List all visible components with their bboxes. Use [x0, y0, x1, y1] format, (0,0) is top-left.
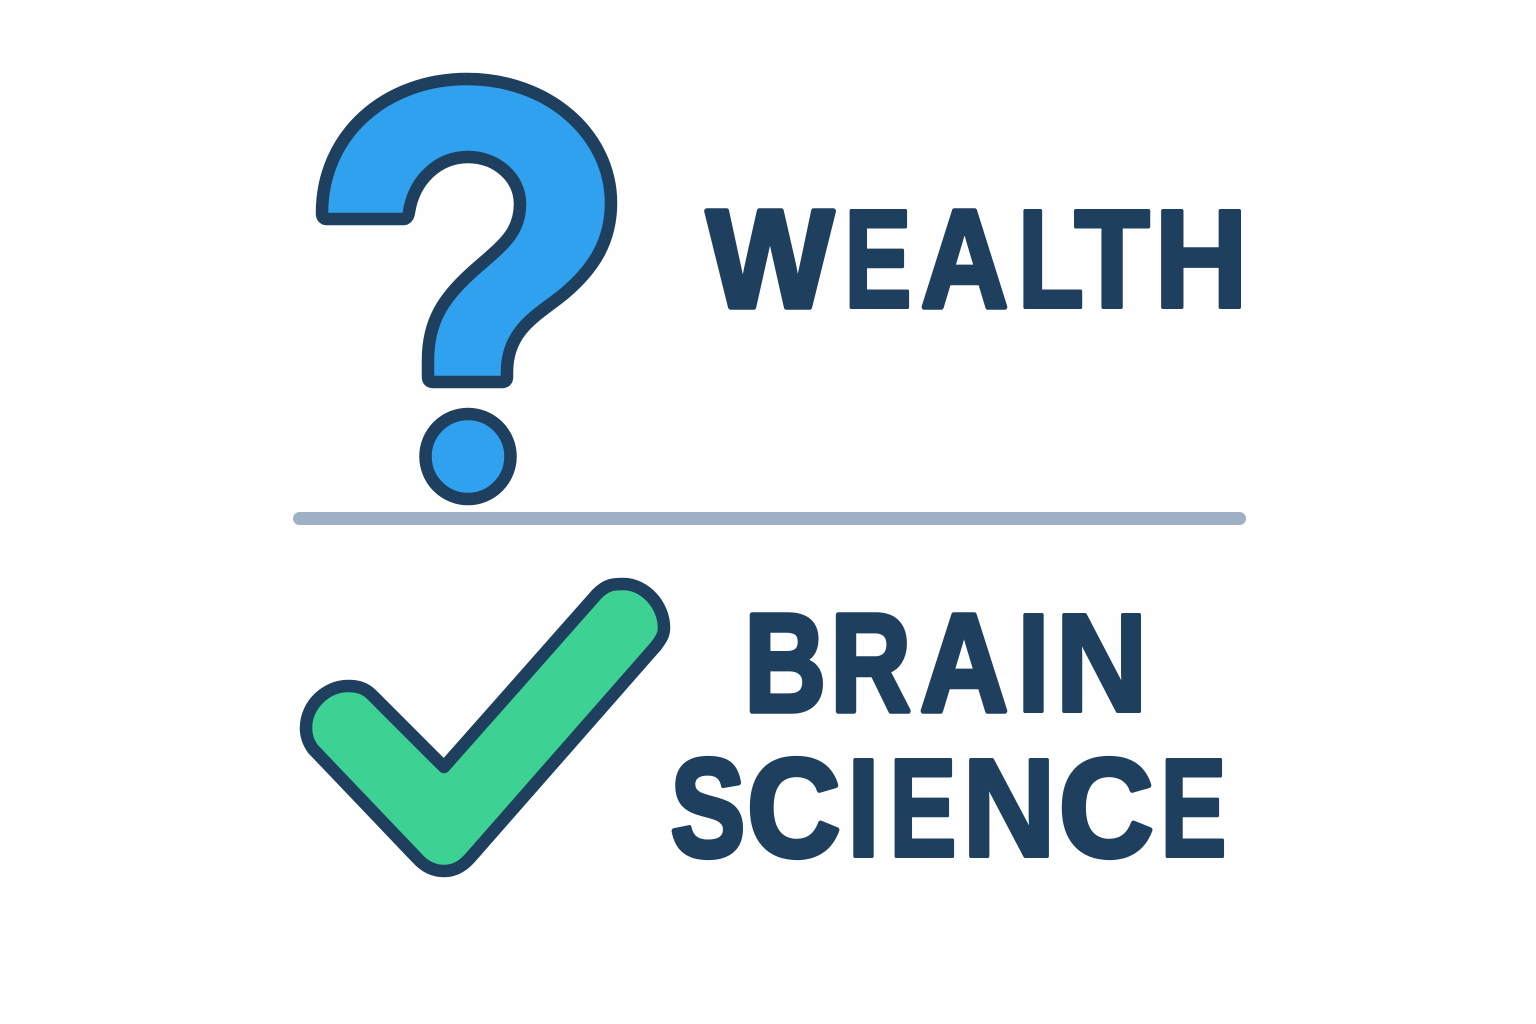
heading: wealth: L: [1018, 181, 1084, 337]
heading: brain science: [671, 585, 1226, 886]
heading: brain science: C: [747, 730, 840, 886]
icon: check mark: [306, 584, 664, 871]
heading: wealth: T: [1074, 181, 1150, 337]
heading: wealth: A: [921, 181, 1008, 337]
heading: wealth: H: [1154, 181, 1248, 337]
heading: brain science: R: [831, 585, 911, 741]
heading: brain science: E: [889, 730, 957, 886]
heading: brain science: A: [920, 585, 1008, 741]
heading: wealth: W: [707, 181, 834, 337]
heading: brain science: N: [1056, 585, 1148, 741]
heading: brain science: I: [1017, 585, 1050, 741]
heading: brain science: E: [1160, 730, 1226, 886]
icon: question mark: [322, 79, 611, 499]
heading: wealth: E: [844, 181, 912, 337]
heading: brain science: B: [744, 585, 826, 741]
heading: brain science: S: [671, 730, 745, 886]
heading: brain science: N: [962, 730, 1056, 886]
heading: brain science: I: [847, 730, 880, 886]
divider line: [293, 512, 1246, 525]
heading: brain science: C: [1059, 730, 1154, 886]
